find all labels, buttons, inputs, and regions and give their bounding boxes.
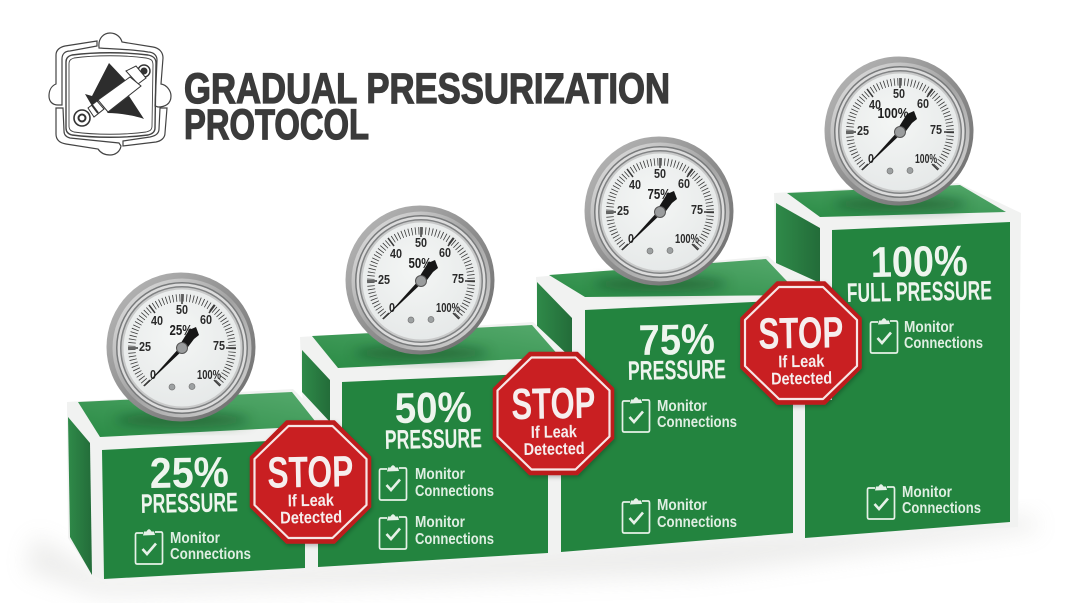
gauge: 50 percent: 0 <box>389 301 395 315</box>
gauge: 25 percent: 75 <box>213 339 225 353</box>
checklist item <box>622 397 737 432</box>
checklist item: Connections <box>902 500 981 517</box>
label: 100 percent: 100% <box>870 237 968 287</box>
stop sign 3: If Leak <box>778 352 825 371</box>
gauge: 50 percent: 25 <box>378 273 390 287</box>
checklist item: Monitor <box>657 497 707 514</box>
gauge: 100 percent: 40 <box>869 98 881 112</box>
gauge: 75 percent: 25 <box>617 204 629 218</box>
panel: step 1 block <box>67 389 325 580</box>
checklist item: Monitor <box>415 466 465 483</box>
gauge: 50 percent <box>346 206 494 360</box>
checklist item: Connections <box>415 531 494 548</box>
gauge: 25 percent: 60 <box>200 313 212 327</box>
gauge: 25 percent <box>106 272 256 427</box>
checklist item: Connections <box>657 414 737 431</box>
floor shadow <box>25 515 1040 595</box>
title: PROTOCOL <box>184 101 369 149</box>
stop sign 2: STOP <box>511 379 596 429</box>
label: full pressure: FULL PRESSURE <box>847 275 992 308</box>
stop sign 1: If Leak <box>288 491 334 510</box>
label: 25 percent: 25% <box>149 449 229 498</box>
checklist item: Monitor <box>904 319 954 336</box>
checklist item: Monitor <box>902 484 952 501</box>
gauge: 50 percent: 75 <box>452 272 464 286</box>
gauge: 25 percent: 25% <box>170 322 192 339</box>
stop sign 2: If Leak <box>531 422 577 442</box>
gauge: 100 percent: 100% <box>878 105 908 122</box>
stop sign 2 <box>494 352 614 474</box>
checklist item: Monitor <box>170 530 220 547</box>
gauge: 100 percent: 75 <box>930 123 942 137</box>
label: 75 percent: 75% <box>638 316 715 365</box>
gauge: 100 percent: 25 <box>857 124 869 138</box>
logo: cylinder <box>74 65 150 126</box>
gauge: 50 percent: 40 <box>390 247 402 261</box>
gauge: 25 percent: 50 <box>176 303 188 317</box>
title <box>184 65 670 149</box>
gauge: 75 percent: 60 <box>678 177 690 191</box>
label: 50 percent: 50% <box>394 384 472 433</box>
label: pressure: PRESSURE <box>385 423 482 455</box>
gauge: 100 percent: 60 <box>917 97 929 111</box>
gauge: 25 percent: 0 <box>150 368 156 382</box>
logo: hydraulic cylinder emblem <box>49 33 171 155</box>
gauge: 75 percent <box>584 136 734 291</box>
gauge: 75 percent: 75% <box>648 186 670 203</box>
panel: step 4 block <box>774 183 1021 540</box>
checklist item <box>380 514 494 549</box>
stop sign 2: Detected <box>523 439 585 459</box>
stop sign 1: STOP <box>267 447 354 498</box>
gauge: 25 percent: 100% <box>197 368 221 382</box>
gauge: 100 percent: 50 <box>893 87 905 101</box>
checklist item: Connections <box>657 514 737 531</box>
gauge: 100 percent <box>824 56 974 211</box>
checklist item <box>870 318 983 353</box>
checklist item: Monitor <box>415 514 465 531</box>
gauge: 25 percent: 25 <box>139 340 151 354</box>
logo: dark triangles <box>85 63 144 119</box>
checklist item <box>622 497 737 533</box>
stop sign 1 <box>250 421 370 543</box>
gauge: 100 percent: 100% <box>915 152 937 166</box>
gauge: 100 percent: 0 <box>868 152 874 166</box>
gauge: 50 percent: 50 <box>415 236 427 250</box>
gauge: 75 percent: 75 <box>691 203 703 217</box>
checklist item: Connections <box>904 335 983 352</box>
gauge: 50 percent: 100% <box>436 301 460 315</box>
stop sign 3 <box>741 282 861 404</box>
stop sign 1: Detected <box>280 507 342 528</box>
panel: step 2 block <box>300 322 568 569</box>
panel: step 3 block <box>536 256 809 553</box>
checklist item: Connections <box>415 483 494 500</box>
checklist item <box>868 484 981 519</box>
title: GRADUAL PRESSURIZATION <box>184 65 670 113</box>
gauge: 25 percent: 40 <box>151 314 163 328</box>
checklist item: Monitor <box>657 398 707 415</box>
label: pressure: PRESSURE <box>628 354 726 386</box>
gauge: 50 percent: 60 <box>439 246 451 260</box>
label: pressure: PRESSURE <box>141 487 238 519</box>
gauge: 50 percent: 50% <box>408 255 432 272</box>
stop sign 3: Detected <box>771 368 832 389</box>
checklist item <box>136 529 251 564</box>
gauge: 75 percent: 100% <box>675 232 699 246</box>
checklist item <box>380 465 494 500</box>
gauge: 75 percent: 0 <box>628 232 634 246</box>
gauge: 75 percent: 50 <box>654 167 666 181</box>
checklist item: Connections <box>170 546 251 563</box>
stop sign 3: STOP <box>758 308 844 359</box>
gauge: 75 percent: 40 <box>629 178 641 192</box>
